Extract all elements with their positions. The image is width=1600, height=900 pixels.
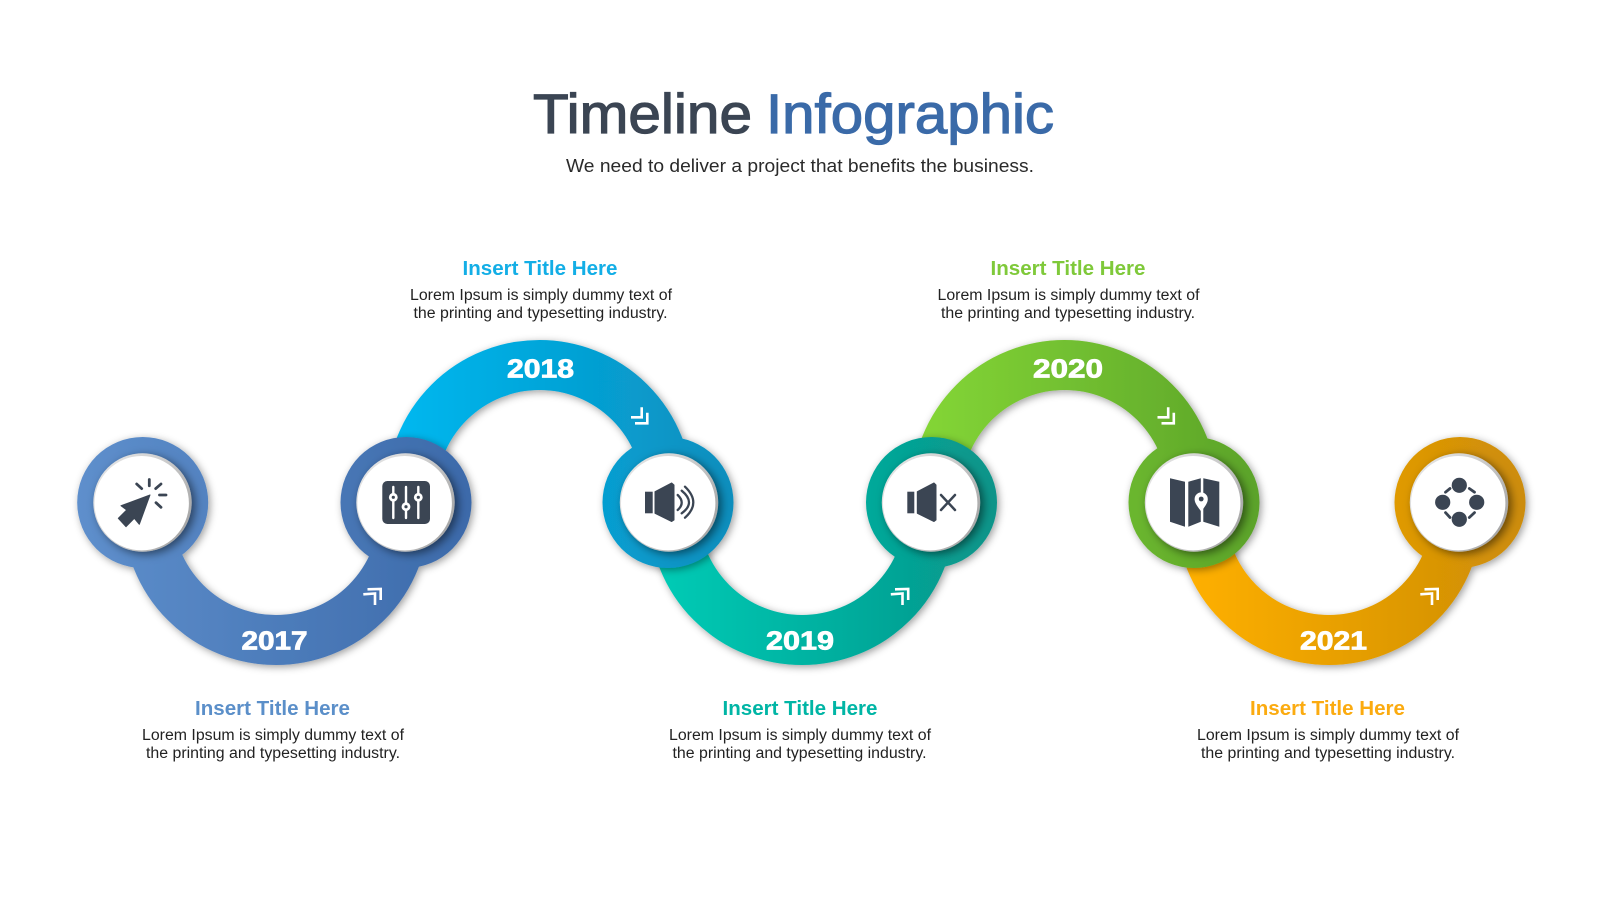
text block: 2021 <box>1197 698 1460 762</box>
text block: 2019: the printing and typesetting industry. <box>672 745 926 762</box>
year: 2020: 2020 <box>1033 354 1103 384</box>
icon: speaker <box>645 483 693 522</box>
icon: muted speaker <box>907 483 955 522</box>
title: Timeline <box>533 82 752 145</box>
year: 2021: 2021 <box>1300 626 1367 656</box>
text block: 2020: Lorem Ipsum is simply dummy text of <box>938 287 1200 304</box>
text block: 2017: the printing and typesetting industry. <box>146 745 400 762</box>
icon: connected nodes <box>1435 478 1484 527</box>
text block: 2020: Insert Title Here <box>990 258 1146 280</box>
ribbon segment: 2019 teal arc and circle <box>674 437 997 640</box>
arrow: 2020 <box>1158 407 1174 423</box>
text block: 2019 <box>669 698 932 762</box>
ribbon segment: 2020 green arc and circle <box>936 365 1260 568</box>
icon: sliders <box>382 481 430 524</box>
ribbon segment: 2021 orange arc and end circle <box>1201 437 1526 640</box>
title <box>533 82 1054 145</box>
icon: cursor click <box>118 480 166 527</box>
arrow: 2019 <box>891 589 908 605</box>
text block: 2021: Insert Title Here <box>1250 698 1405 720</box>
year: 2017: 2017 <box>242 626 308 656</box>
year: 2019: 2019 <box>766 626 834 656</box>
icon: folded map with pin <box>1170 478 1219 527</box>
text block: 2018: Lorem Ipsum is simply dummy text of <box>410 287 673 304</box>
arrow: 2021 <box>1420 589 1438 605</box>
subtitle: We need to deliver a project that benefits the business. <box>566 155 1034 176</box>
text block: 2021: Lorem Ipsum is simply dummy text of <box>1197 727 1460 744</box>
ribbon segment: 2017 steel-blue arc and circles <box>77 437 471 640</box>
text block: 2020 <box>938 258 1200 322</box>
text block: 2019: Lorem Ipsum is simply dummy text of <box>669 727 932 744</box>
text block: 2017: Insert Title Here <box>195 698 350 720</box>
text block: 2021: the printing and typesetting industry. <box>1201 745 1455 762</box>
arrow: 2017 <box>363 589 381 605</box>
text block: 2018: the printing and typesetting industry. <box>414 305 668 322</box>
title: Infographic <box>766 82 1054 145</box>
text block: 2019: Insert Title Here <box>722 698 878 720</box>
white icon discs <box>93 453 1508 552</box>
text block: 2020: the printing and typesetting industry. <box>941 305 1195 322</box>
ribbon segment: 2018 blue arc and circle <box>412 365 734 568</box>
arrow: 2018 <box>631 407 647 423</box>
text block: 2018: Insert Title Here <box>462 258 618 280</box>
year: 2018: 2018 <box>507 354 574 384</box>
text block: 2017 <box>142 698 405 762</box>
text block: 2018 <box>410 258 673 322</box>
text block: 2017: Lorem Ipsum is simply dummy text of <box>142 727 405 744</box>
